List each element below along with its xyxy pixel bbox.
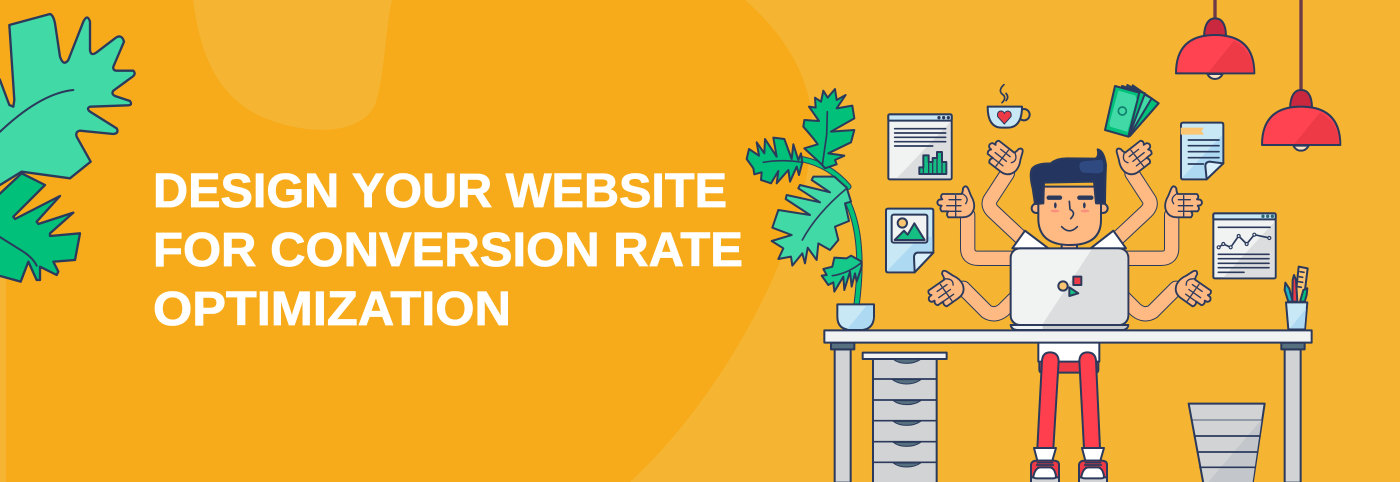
background blob bbox=[0, 0, 812, 482]
large leaves top left bbox=[0, 14, 135, 282]
head bbox=[1031, 149, 1108, 248]
bottom leaf bbox=[822, 256, 862, 292]
man with six arms bbox=[920, 85, 1219, 330]
lamps, note, chart window, pencil cup bbox=[1176, 0, 1340, 329]
cheeks bbox=[1051, 210, 1059, 212]
lamp 1 bbox=[1176, 0, 1254, 79]
plant pot bbox=[837, 304, 874, 330]
right table leg bbox=[1281, 343, 1305, 482]
laptop logo bbox=[1058, 277, 1081, 296]
eyes bbox=[1054, 202, 1057, 208]
plant stems bbox=[803, 159, 859, 304]
hands bbox=[920, 132, 1219, 313]
line chart bbox=[1217, 233, 1271, 249]
title bbox=[153, 165, 743, 336]
desk area bbox=[824, 330, 1312, 482]
window document with bar chart bbox=[888, 114, 952, 179]
image document bbox=[886, 209, 933, 272]
shirt bbox=[1012, 231, 1126, 248]
left leg bbox=[1031, 352, 1059, 482]
plant leaves bbox=[747, 89, 862, 292]
big light leaf bbox=[772, 177, 851, 266]
nose and mouth bbox=[1062, 201, 1077, 231]
laptop bbox=[1011, 248, 1128, 330]
coffee cup bbox=[988, 85, 1030, 128]
title: DESIGN YOUR WEBSITE bbox=[153, 165, 727, 218]
money bbox=[1105, 85, 1159, 137]
dark green leaf bbox=[0, 173, 80, 282]
light leaf vein bbox=[0, 90, 73, 133]
light green leaf bbox=[0, 14, 135, 187]
title: OPTIMIZATION bbox=[153, 283, 511, 336]
top leaf bbox=[803, 89, 854, 168]
waste bin bbox=[1189, 404, 1265, 482]
lamp 2 bbox=[1262, 0, 1340, 151]
dark leaf vein bbox=[0, 236, 37, 266]
note document bbox=[1181, 123, 1223, 179]
pencil cup bbox=[1285, 267, 1308, 329]
left leaf bbox=[747, 138, 802, 183]
shirt bottom and seat bbox=[1038, 342, 1099, 373]
hair bbox=[1031, 149, 1106, 204]
arms bbox=[963, 173, 1176, 314]
plant and documents bbox=[747, 89, 952, 330]
title: FOR CONVERSION RATE bbox=[153, 224, 743, 277]
drawer unit bbox=[863, 353, 947, 482]
window with line chart bbox=[1213, 213, 1276, 278]
right leg bbox=[1079, 352, 1107, 482]
eyebrows bbox=[1049, 191, 1091, 204]
left table leg bbox=[831, 343, 854, 482]
desk top bbox=[824, 330, 1312, 343]
